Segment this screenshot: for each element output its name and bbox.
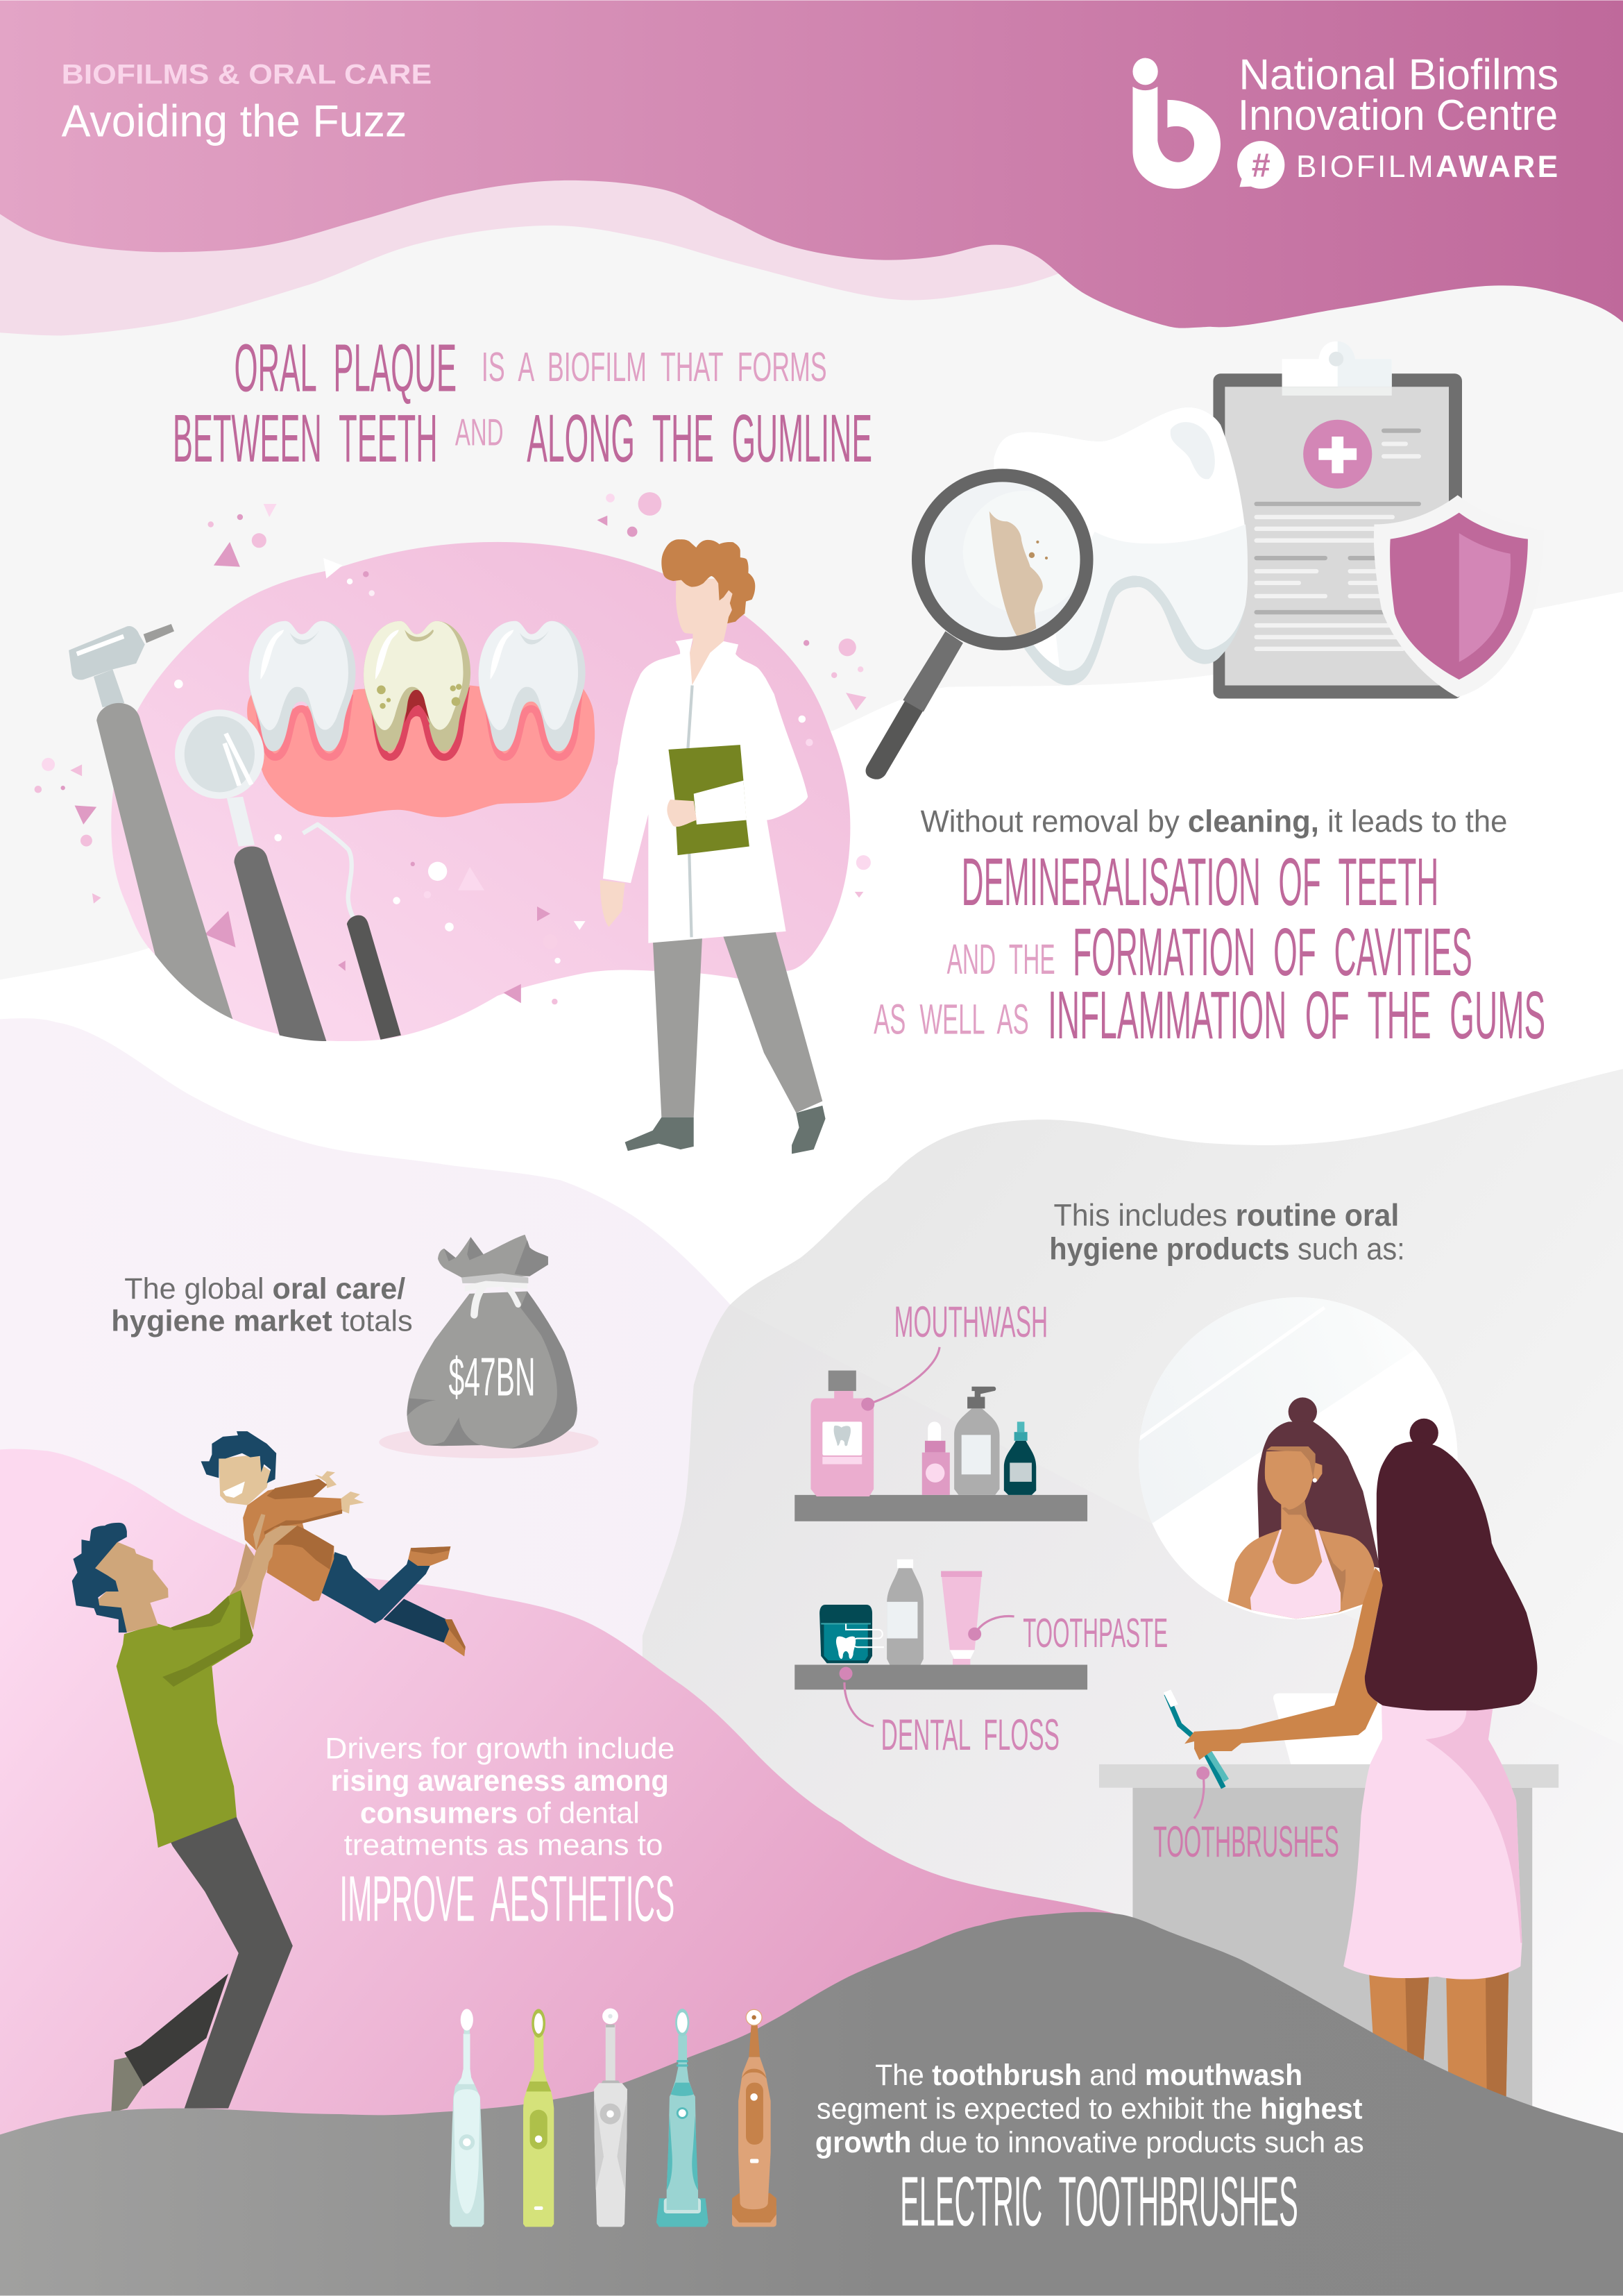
legs xyxy=(1368,1962,1430,2079)
mirror with reflection xyxy=(1139,1297,1457,1619)
main pink wave xyxy=(0,1449,1115,2296)
shelf 2 with floss, bottle and toothpaste xyxy=(794,1560,1087,1689)
paragraph: consequences xyxy=(874,804,1545,1053)
teal bottle xyxy=(1004,1421,1036,1495)
callout: dental floss xyxy=(840,1667,1060,1759)
heading: oral plaque: ORAL PLAQUE xyxy=(234,330,457,406)
infographic canvas: IMPROVE AESTHETICS xyxy=(339,1863,674,1935)
callout: toothbrushes: TOOTHBRUSHES xyxy=(1153,1818,1339,1866)
text: global market xyxy=(111,1272,413,1337)
child xyxy=(201,1431,466,1656)
pink blob behind dentist scene xyxy=(111,542,850,1041)
logo: National Biofilms Innovation Centre: National Biofilms xyxy=(1239,51,1558,99)
money bag xyxy=(379,1235,599,1458)
dental probe xyxy=(303,825,401,1040)
text: drivers for growth xyxy=(325,1732,674,1935)
hair xyxy=(1409,1419,1438,1447)
serum bottle xyxy=(922,1421,950,1495)
header pink wave xyxy=(0,0,1623,328)
text: electric toothbrushes: The toothbrush and mouthwash xyxy=(875,2059,1302,2091)
callout: mouthwash: MOUTHWASH xyxy=(894,1298,1048,1347)
big tooth xyxy=(994,407,1248,685)
text: global market: hygiene market totals xyxy=(111,1305,413,1337)
callout: dental floss: DENTAL FLOSS xyxy=(881,1711,1060,1759)
arm xyxy=(1184,1568,1383,1760)
magnifier xyxy=(866,475,1087,779)
text: drivers for growth: treatments as means to xyxy=(344,1829,663,1862)
text: electric toothbrushes: growth due to innovative products such as xyxy=(815,2126,1364,2159)
woman brushing teeth xyxy=(1164,1419,1537,2109)
heading: oral plaque: BETWEEN TEETH xyxy=(173,400,438,476)
text: drivers for growth: consumers of dental xyxy=(360,1796,640,1829)
text: drivers for growth: rising awareness among xyxy=(331,1764,669,1797)
plain bottle xyxy=(887,1560,924,1665)
paragraph: consequences: AND THE xyxy=(947,936,1055,983)
text: drivers for growth: Drivers for growth include xyxy=(325,1732,674,1764)
infographic canvas: ALONG THE GUMLINE xyxy=(527,400,872,476)
text: routine products: hygiene products such as: xyxy=(1049,1232,1405,1266)
clipboard xyxy=(1213,341,1462,699)
title block: BIOFILMS & ORAL CARE xyxy=(62,60,432,90)
dark grey foreground wave xyxy=(0,1912,1623,2296)
heading: oral plaque: IS A BIOFILM THAT FORMS xyxy=(482,344,827,390)
heading: oral plaque: AND xyxy=(455,411,504,454)
light grey wave xyxy=(643,1069,1623,2296)
big tooth, clipboard, shield and magnifier xyxy=(866,341,1544,779)
logo: National Biofilms Innovation Centre: # xyxy=(1252,147,1271,185)
electric toothbrush 5 xyxy=(732,2009,776,2227)
header light wave xyxy=(0,146,1141,335)
callout: toothbrushes xyxy=(1153,1766,1339,1866)
logo: National Biofilms Innovation Centre: BIOFILMAWARE xyxy=(1296,150,1558,184)
electric toothbrush 2 xyxy=(523,2009,554,2227)
text: electric toothbrushes: segment is expected to exhibit the highest xyxy=(817,2092,1363,2125)
electric toothbrush 1 xyxy=(450,2009,484,2227)
mouthwash bottle xyxy=(810,1371,874,1496)
man lifting child xyxy=(72,1514,297,2113)
lilac wave xyxy=(0,1018,1623,2296)
paragraph: consequences: AS WELL AS xyxy=(874,995,1029,1043)
toothbrush in hand xyxy=(1166,1694,1223,1788)
gums and three teeth xyxy=(247,621,595,817)
shelf 1 with mouthwash and bottles xyxy=(794,1371,1087,1521)
electric toothbrush 4 xyxy=(656,2009,708,2227)
title block xyxy=(62,60,432,146)
paragraph: consequences: Without removal by cleaning, it leads to the xyxy=(921,804,1507,838)
text: routine products: This includes routine oral xyxy=(1054,1199,1399,1233)
confetti particles xyxy=(35,492,871,1004)
text: routine products xyxy=(1049,1199,1405,1266)
pump bottle xyxy=(954,1387,1000,1495)
dental drill xyxy=(69,624,232,1019)
dental floss xyxy=(819,1605,884,1663)
title block: Avoiding the Fuzz xyxy=(62,96,407,146)
dental mirror xyxy=(175,709,326,1041)
text: global market: The global oral care/ xyxy=(124,1272,405,1305)
sink counter xyxy=(1099,1694,1558,2139)
logo: National Biofilms Innovation Centre xyxy=(1132,51,1558,189)
money bag: $47BN xyxy=(448,1346,536,1407)
callout: mouthwash xyxy=(861,1298,1048,1411)
dress xyxy=(1343,1704,1522,1980)
shield xyxy=(1374,495,1544,697)
text: electric toothbrushes xyxy=(815,2059,1364,2240)
callout: toothpaste: TOOTHPASTE xyxy=(1023,1610,1168,1656)
electric toothbrush 3 xyxy=(594,2009,627,2227)
toothpaste tube xyxy=(941,1571,982,1665)
dentist figure xyxy=(600,539,826,1154)
callout: toothpaste xyxy=(968,1610,1168,1656)
heading: oral plaque xyxy=(173,330,872,476)
logo: National Biofilms Innovation Centre: Innovation Centre xyxy=(1238,91,1558,140)
